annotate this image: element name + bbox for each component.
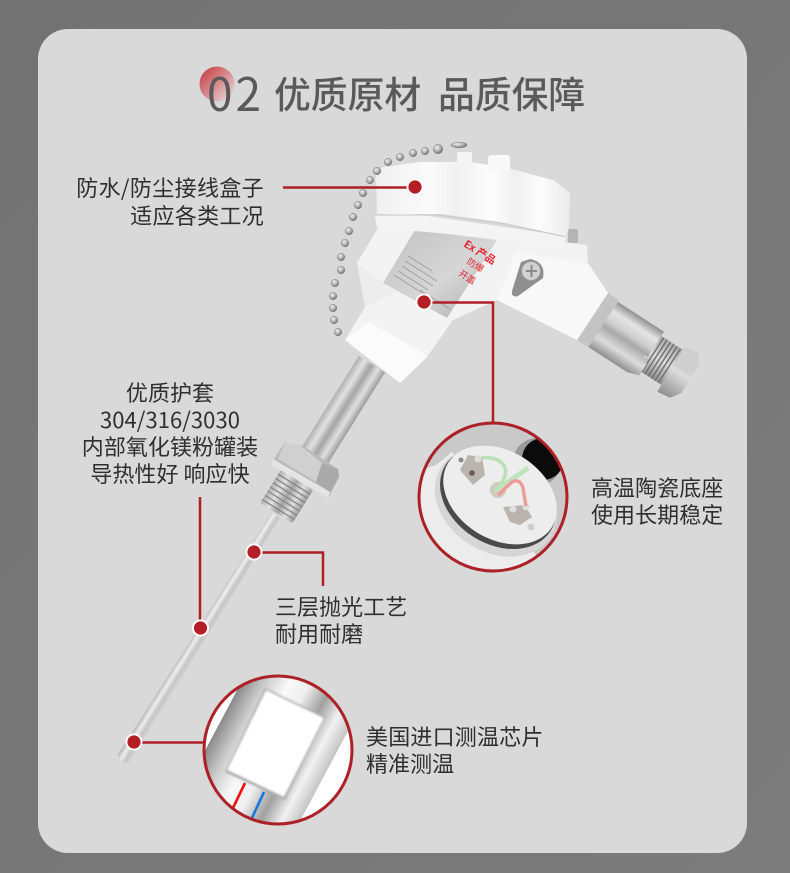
text: ceramic base: 使用长期稳定 [591,498,723,530]
text: ceramic base [591,471,723,530]
text: sheath: 304/316/3030 [100,403,240,435]
lens ring: sensor chip [204,676,352,824]
right side fitting [577,293,705,403]
leader: junction box [283,178,424,196]
leader: polishing [246,544,323,586]
text: junction box: 防水/防尘接线盒子 [76,171,264,203]
nameplate: Ex 产品 [461,237,499,268]
text: sheath: 内部氧化镁粉罐装 [82,430,258,462]
screw tab [512,259,543,296]
text: chip [366,720,544,779]
hex nut [273,442,339,497]
text: sheath: 导热性好 响应快 [90,457,250,489]
leader: ceramic base [416,294,493,423]
icon: red gradient ball [200,66,234,102]
upper tube [302,356,385,464]
bead chain [329,142,467,336]
title text: second part: 品质保障 [438,65,585,119]
product: temperature sensor [116,142,705,765]
title text: first part: 优质原材 [274,65,421,119]
lens: ceramic base [420,424,566,570]
nameplate: 防爆 [464,255,487,275]
text: junction box: 适应各类工况 [130,199,264,231]
text: polishing [275,590,407,649]
text: polishing: 耐用耐磨 [275,617,363,649]
nameplate: 开盖 [456,267,479,287]
cap [376,162,570,236]
text: chip: 精准测温 [366,747,454,779]
lens ring: ceramic base [419,423,567,571]
leader: sheath [192,497,209,636]
text: sheath: 优质护套 [126,376,214,408]
junction box body [345,228,608,383]
text: chip: 美国进口测温芯片 [366,720,544,752]
threaded fitting [260,470,313,523]
text: polishing: 三层抛光工艺 [275,590,407,622]
lens: sensor chip [206,678,350,822]
text: sheath [82,376,258,489]
text: junction box [76,171,264,231]
text: ceramic base: 高温陶瓷底座 [591,471,723,503]
title number: 02 [207,59,264,125]
leader: chip [126,734,205,750]
nameplate [383,230,499,318]
screw pin [568,229,578,243]
title [200,59,585,125]
rod below nut [116,511,282,765]
cap flange [375,212,567,248]
cap knobs [488,155,510,171]
